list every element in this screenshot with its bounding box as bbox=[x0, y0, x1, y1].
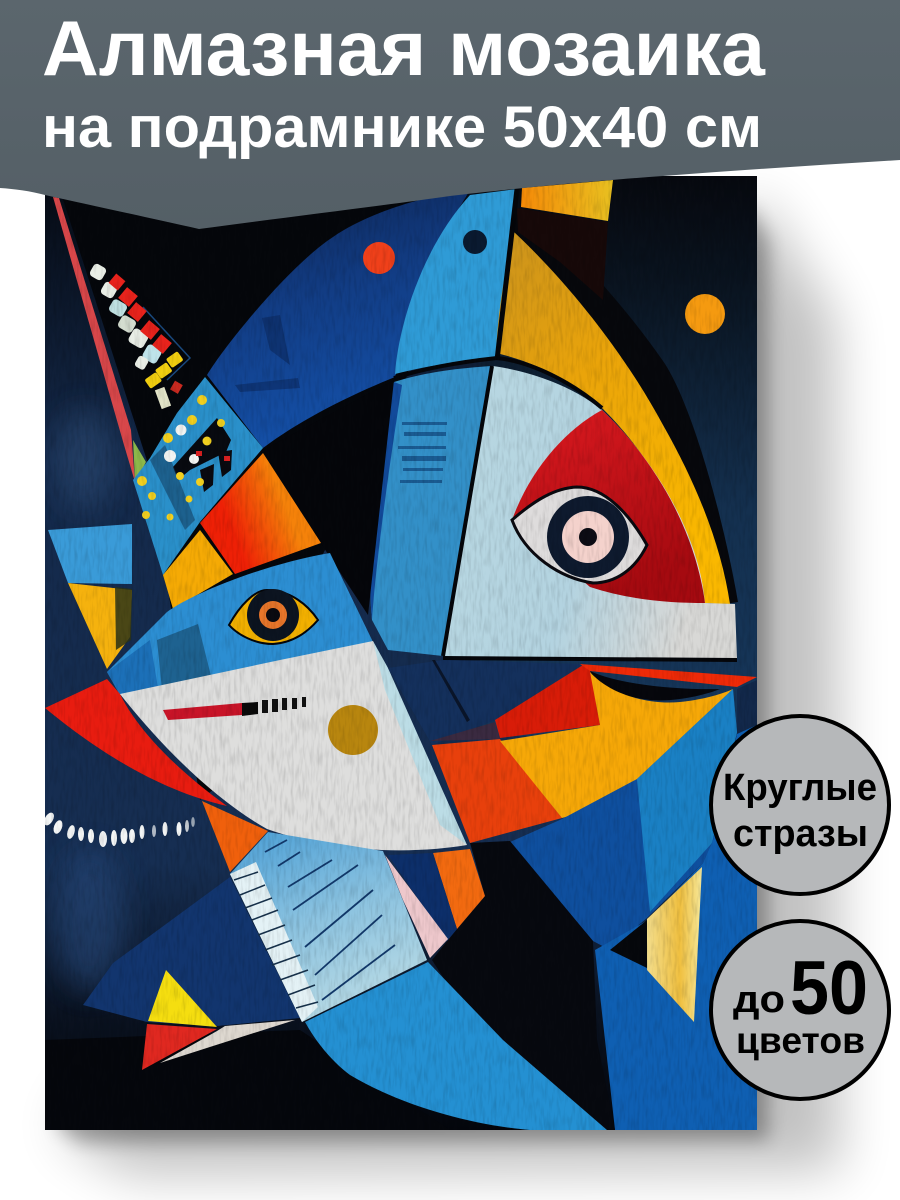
canvas drop shadow bbox=[55, 195, 840, 1175]
black body outline bbox=[394, 189, 737, 660]
painting background bbox=[45, 176, 757, 1130]
navy triangle lower left bbox=[83, 877, 300, 1026]
white ladder on fin bbox=[230, 862, 318, 1022]
black band along crescent bbox=[514, 208, 738, 604]
blue head bbox=[107, 553, 373, 695]
black triangle bbox=[610, 920, 647, 968]
dark blue sliver bbox=[388, 853, 457, 941]
red needle bbox=[53, 197, 135, 482]
red small triangle bbox=[142, 1024, 217, 1070]
title line 1: Алмазная мозаика bbox=[42, 4, 766, 92]
orange triangle bbox=[202, 801, 268, 872]
light blue feather bbox=[395, 189, 517, 374]
title line 2: на подрамнике 50х40 см bbox=[42, 95, 762, 160]
row of white teeth bbox=[42, 811, 195, 847]
badge: round rhinestones bbox=[711, 716, 889, 894]
arc dark brush marks bbox=[235, 315, 300, 392]
red left beak bbox=[45, 679, 227, 806]
brush texture overlay bbox=[45, 176, 757, 1130]
brown dark wedge bbox=[517, 208, 608, 300]
green needle tip bbox=[133, 440, 146, 482]
yellow small triangle bbox=[148, 970, 217, 1027]
left yellow panel bbox=[68, 583, 132, 669]
gold circle bbox=[328, 705, 378, 755]
center black patch bbox=[325, 382, 394, 615]
dark blue strip edge bbox=[370, 382, 402, 620]
lower center line bbox=[432, 660, 470, 722]
badge: up to 50 colors: цветов bbox=[736, 1020, 865, 1061]
red fish head segment bbox=[512, 410, 705, 603]
large eye bbox=[512, 487, 647, 583]
large yellow crescent bbox=[496, 232, 730, 604]
large dark blue arc bbox=[207, 190, 470, 448]
white shard bbox=[160, 1020, 295, 1063]
body right light edge bbox=[373, 641, 467, 845]
red beak right bbox=[495, 665, 600, 738]
blue center strip bbox=[370, 366, 492, 656]
badge: round rhinestones: Круглые bbox=[723, 767, 877, 809]
white center body bbox=[120, 641, 467, 850]
small eye bbox=[229, 589, 318, 644]
light blue lower tail bbox=[305, 962, 607, 1130]
dark patch in head bbox=[157, 624, 212, 690]
yellow panel bbox=[647, 867, 702, 1022]
black mouth shape bbox=[590, 671, 720, 700]
left blue panel bbox=[48, 524, 132, 584]
lighter blue lower section bbox=[637, 689, 737, 912]
badge: up to 50 colors: до bbox=[733, 979, 785, 1021]
fin strokes bbox=[265, 840, 395, 1000]
orange stripe bbox=[433, 849, 485, 929]
red circle bbox=[363, 242, 395, 274]
yellow block bbox=[163, 530, 233, 609]
red stripe at mouth bbox=[580, 664, 757, 687]
badge: up to 50 colors: 50 bbox=[790, 946, 868, 1031]
purple fragment bbox=[430, 722, 500, 741]
bottom right blue bbox=[595, 725, 757, 1130]
pink shard bbox=[385, 855, 448, 958]
right navy strip bbox=[737, 680, 757, 734]
blue tower with dots bbox=[133, 377, 263, 575]
orange-red block lower bbox=[432, 739, 562, 843]
badge: round rhinestones: стразы bbox=[733, 813, 868, 855]
dark blue lower section bbox=[510, 689, 737, 950]
orange top rectangle bbox=[521, 180, 613, 221]
top banner bbox=[0, 0, 900, 229]
painting: abstract fish composition on canvas bbox=[42, 176, 757, 1130]
orange circle bbox=[685, 294, 725, 334]
yellow lower fish bbox=[500, 672, 733, 818]
black lower center bbox=[432, 841, 615, 1130]
badge: up to 50 colors bbox=[711, 921, 889, 1099]
pale fish body bbox=[443, 366, 737, 659]
orange-red block bbox=[200, 453, 321, 574]
central navy fragment bbox=[388, 660, 480, 745]
dotted ladder at needle bbox=[88, 262, 190, 409]
pale blue fin bbox=[230, 832, 427, 1022]
hatched dark stripe bbox=[115, 587, 132, 650]
strip texture bbox=[398, 422, 447, 483]
dark dot on feather bbox=[463, 230, 487, 254]
red and black dash on white body bbox=[163, 697, 306, 720]
